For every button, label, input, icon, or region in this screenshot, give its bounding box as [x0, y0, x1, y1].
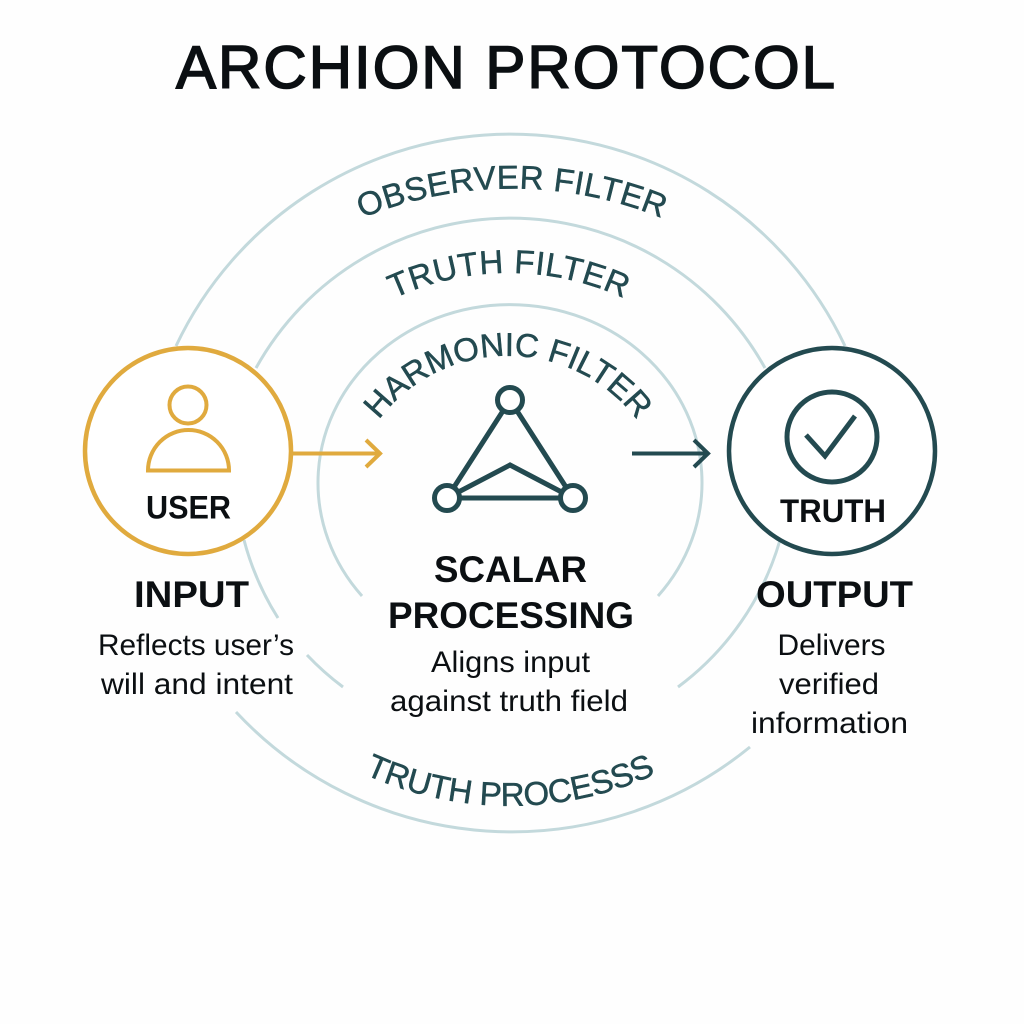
- label: harmonic filter: HARMONIC FILTER: [362, 332, 650, 420]
- ring: harmonic filter: [318, 305, 702, 596]
- output text: [751, 574, 913, 740]
- input text: [98, 574, 294, 701]
- label: truth process: TRUTH PROCESSS: [372, 753, 653, 806]
- input text: will and intent: [100, 668, 294, 701]
- ring: truth filter: [244, 218, 780, 687]
- icon: user: [148, 386, 229, 470]
- scalar processing text: Aligns input: [431, 646, 591, 679]
- output text: information: [751, 707, 908, 740]
- scalar processing text: SCALAR: [434, 549, 587, 590]
- ring: observer filter: [176, 134, 845, 832]
- scalar processing text: against truth field: [390, 685, 628, 718]
- label: truth filter: TRUTH FILTER: [385, 250, 629, 298]
- output text: verified: [779, 668, 879, 701]
- output text: OUTPUT: [756, 574, 913, 615]
- user label: USER: [146, 490, 231, 526]
- truth node: [729, 348, 935, 554]
- arrow: input to processing: [293, 440, 380, 467]
- truth label: TRUTH: [780, 493, 886, 529]
- scalar processing text: [388, 549, 634, 718]
- label: observer filter: OBSERVER FILTER: [358, 166, 666, 218]
- icon: triangle network: [434, 388, 586, 510]
- scalar processing text: PROCESSING: [388, 595, 634, 636]
- input text: Reflects user’s: [98, 629, 294, 662]
- input text: INPUT: [134, 574, 249, 615]
- arrow: processing to output: [632, 440, 708, 467]
- title: ARCHION PROTOCOL: [176, 34, 835, 101]
- icon: check circle: [787, 392, 877, 482]
- output text: Delivers: [778, 629, 886, 662]
- user node: [85, 348, 291, 554]
